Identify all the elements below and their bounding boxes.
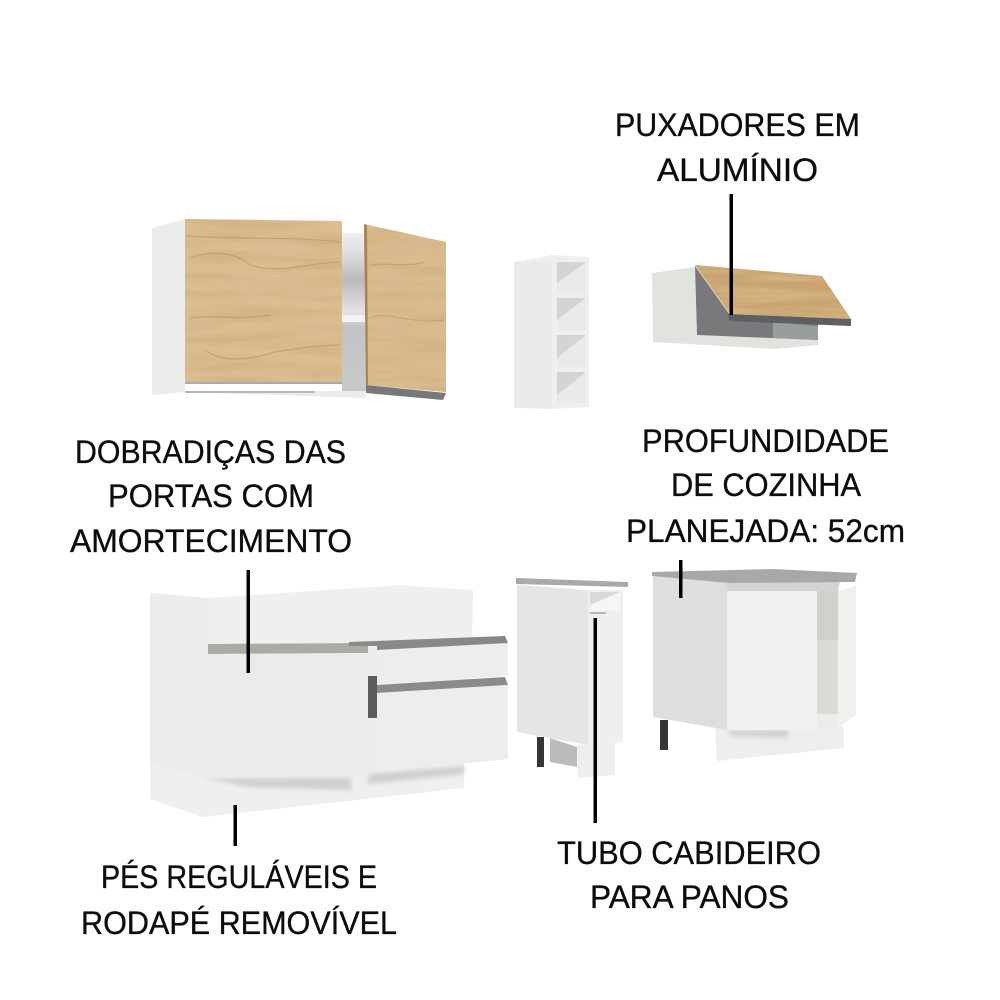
label: cabinet depth: PLANEJADA: 52cm — [626, 513, 905, 549]
pointer: door hinges — [246, 570, 250, 673]
upper cabinet with two wood doors — [152, 219, 446, 400]
base cabinet with door and two drawers — [150, 585, 508, 817]
label: cabinet depth: PROFUNDIDADE — [642, 423, 889, 459]
flip-up wall cabinet with wood door — [652, 265, 851, 349]
open shelf tower cabinet — [514, 255, 589, 409]
label: door hinges: PORTAS COM — [108, 478, 314, 514]
label: towel rail — [557, 835, 821, 915]
label: door hinges — [70, 434, 352, 559]
corner base cabinet — [652, 569, 857, 761]
label: door hinges: AMORTECIMENTO — [70, 523, 352, 559]
label: cabinet depth — [626, 423, 905, 549]
pointer: cabinet depth — [679, 560, 682, 598]
label: door hinges: DOBRADIÇAS DAS — [75, 434, 346, 470]
label: cabinet depth: DE COZINHA — [671, 467, 862, 503]
pointer: aluminium handles — [730, 194, 733, 315]
label: towel rail: TUBO CABIDEIRO — [557, 835, 821, 871]
pointer: adjustable feet — [234, 805, 237, 846]
label: towel rail: PARA PANOS — [590, 879, 789, 915]
label: adjustable feet and plinth — [81, 859, 397, 941]
label: adjustable feet and plinth: PÉS REGULÁVEIS E — [101, 859, 377, 895]
label: aluminium handles — [615, 107, 860, 188]
narrow base cabinet with towel rail — [516, 578, 628, 778]
label: aluminium handles: ALUMÍNIO — [657, 152, 818, 188]
pointer: towel rail — [594, 618, 597, 823]
label: adjustable feet and plinth: RODAPÉ REMOVÍVEL — [81, 905, 397, 941]
label: aluminium handles: PUXADORES EM — [615, 107, 860, 143]
